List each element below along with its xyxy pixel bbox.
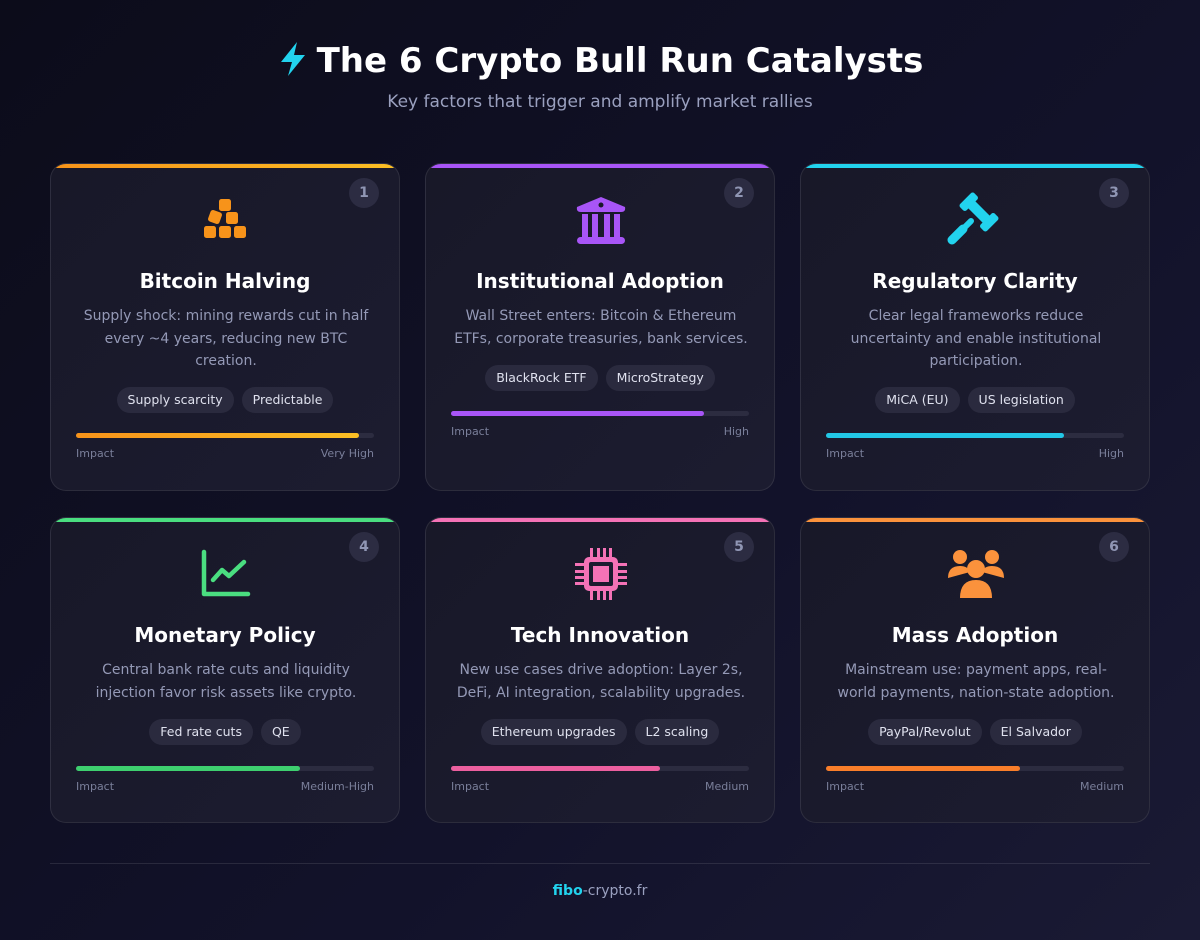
number badge: 4 xyxy=(359,539,369,555)
impact bar xyxy=(451,766,749,771)
tags xyxy=(868,719,1082,745)
impact labels: Impact xyxy=(451,425,489,438)
tags: Supply scarcity xyxy=(128,392,223,407)
tags: El Salvador xyxy=(1001,724,1071,739)
icon: bank xyxy=(576,197,626,244)
tags xyxy=(149,719,301,745)
description: Clear legal frameworks reduce uncertainty and enable institutional participation. xyxy=(851,308,1101,369)
icon: chip xyxy=(575,548,627,600)
number badge xyxy=(724,178,754,208)
impact labels: Impact xyxy=(826,780,864,793)
number badge xyxy=(724,532,754,562)
tags: MiCA (EU) xyxy=(886,392,949,407)
number badge: 3 xyxy=(1109,185,1119,201)
panel: mass adoption xyxy=(800,517,1150,823)
panel: bitcoin halving xyxy=(50,163,400,491)
heading: Bitcoin Halving xyxy=(140,269,310,293)
tags xyxy=(875,387,1075,413)
panel: regulatory clarity xyxy=(800,163,1150,491)
tags: Predictable xyxy=(253,392,322,407)
impact labels: Impact xyxy=(76,780,114,793)
number badge: 1 xyxy=(359,185,369,201)
description: Wall Street enters: Bitcoin & Ethereum ETFs, corporate treasuries, bank services. xyxy=(454,308,748,346)
tags: US legislation xyxy=(979,392,1064,407)
panel: monetary policy xyxy=(50,517,400,823)
impact labels: Impact xyxy=(76,447,114,460)
description: New use cases drive adoption: Layer 2s, DeFi, AI integration, scalability upgrades. xyxy=(457,662,745,700)
impact labels xyxy=(826,447,1124,460)
impact labels xyxy=(451,425,749,438)
tags: Fed rate cuts xyxy=(160,724,242,739)
impact labels: Impact xyxy=(826,447,864,460)
panel: institutional adoption xyxy=(425,163,775,491)
heading: Tech Innovation xyxy=(511,623,689,647)
number badge: 5 xyxy=(734,539,744,555)
footer: fibo-crypto.fr xyxy=(553,883,647,899)
description: Mainstream use: payment apps, real-world payments, nation-state adoption. xyxy=(838,662,1114,700)
icon: chart xyxy=(202,550,250,596)
heading: Regulatory Clarity xyxy=(872,269,1078,293)
impact labels: Impact xyxy=(451,780,489,793)
icon: blocks xyxy=(204,199,246,238)
description: Supply shock: mining rewards cut in half every ~4 years, reducing new BTC creation. xyxy=(84,308,368,369)
icon: people xyxy=(948,550,1004,598)
tags xyxy=(485,365,715,391)
impact labels: Medium-High xyxy=(301,780,374,793)
impact bar xyxy=(451,411,749,416)
heading: Mass Adoption xyxy=(892,623,1058,647)
impact labels: High xyxy=(724,425,749,438)
tags: PayPal/Revolut xyxy=(879,724,971,739)
tags xyxy=(117,387,333,413)
impact labels xyxy=(826,780,1124,793)
tags: Ethereum upgrades xyxy=(492,724,616,739)
tags: QE xyxy=(272,724,290,739)
tags: L2 scaling xyxy=(646,724,708,739)
number badge xyxy=(349,178,379,208)
icon: gavel xyxy=(948,192,998,244)
impact labels: Very High xyxy=(321,447,374,460)
impact labels xyxy=(451,780,749,793)
number badge: 6 xyxy=(1109,539,1119,555)
impact labels xyxy=(76,447,374,460)
impact labels: High xyxy=(1099,447,1124,460)
subtitle: Key factors that trigger and amplify market rallies xyxy=(387,92,813,112)
tags xyxy=(481,719,719,745)
number badge xyxy=(1099,178,1129,208)
impact labels: Medium xyxy=(1080,780,1124,793)
title: The 6 Crypto Bull Run Catalysts xyxy=(317,41,923,81)
tags: BlackRock ETF xyxy=(496,370,587,385)
impact labels xyxy=(76,780,374,793)
number badge: 2 xyxy=(734,185,744,201)
impact bar xyxy=(826,433,1124,438)
heading: Monetary Policy xyxy=(134,623,316,647)
panel: tech innovation xyxy=(425,517,775,823)
impact bar xyxy=(826,766,1124,771)
impact bar xyxy=(76,433,374,438)
description: Central bank rate cuts and liquidity injection favor risk assets like crypto. xyxy=(96,662,356,700)
impact labels: Medium xyxy=(705,780,749,793)
heading: Institutional Adoption xyxy=(476,269,724,293)
number badge xyxy=(349,532,379,562)
impact bar xyxy=(76,766,374,771)
tags: MicroStrategy xyxy=(617,370,704,385)
number badge xyxy=(1099,532,1129,562)
